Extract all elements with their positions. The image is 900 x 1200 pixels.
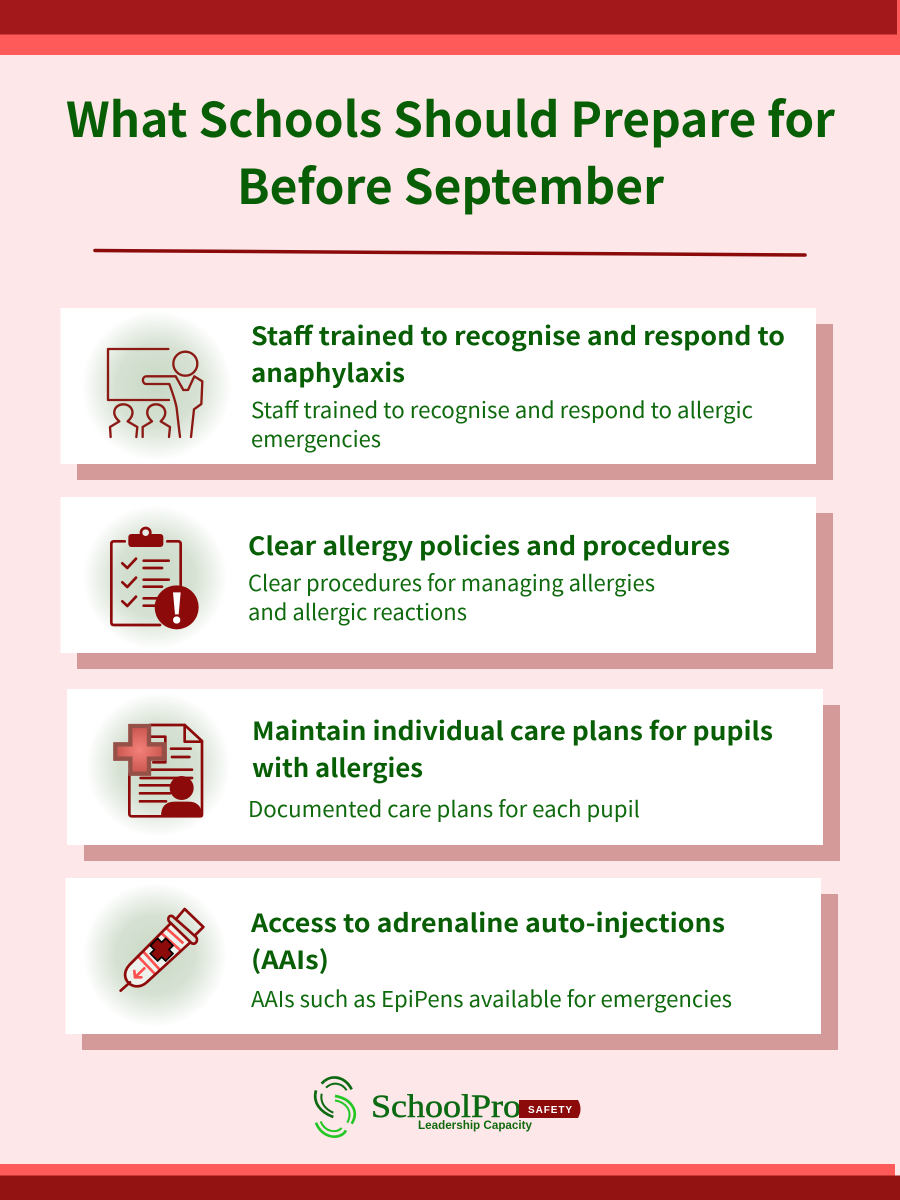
body text <box>251 393 753 454</box>
body text: Staff trained to recognise and respond to allergic <box>251 393 753 425</box>
body text <box>248 566 655 627</box>
heading <box>252 712 773 785</box>
safety badge <box>519 1100 580 1118</box>
body text: Clear procedures for managing allergies <box>248 566 655 598</box>
logo: SchoolPro Safety <box>315 1077 580 1137</box>
wordmark: SchoolPro <box>371 1089 521 1125</box>
title divider line <box>95 250 805 255</box>
panel: allergy policies <box>60 497 833 669</box>
tagline: Leadership Capacity <box>418 1120 533 1132</box>
icon: care plan document with medical cross <box>86 693 231 837</box>
icon: clipboard with alert <box>83 505 227 650</box>
title <box>66 81 835 218</box>
panel: staff training <box>60 308 833 480</box>
bottom band <box>0 1164 900 1200</box>
body text: AAIs such as EpiPens available for emergencies <box>251 982 732 1014</box>
title: Before September <box>237 148 664 218</box>
body text: and allergic reactions <box>248 595 467 627</box>
top band <box>0 0 900 55</box>
heading <box>251 317 785 390</box>
icon: auto-injector <box>83 883 227 1027</box>
heading: Maintain individual care plans for pupils <box>252 712 773 748</box>
panel: care plans <box>67 689 840 861</box>
logo mark <box>315 1077 355 1137</box>
body text: Documented care plans for each pupil <box>248 792 640 824</box>
heading: Access to adrenaline auto-injections <box>250 904 725 940</box>
heading: Staff trained to recognise and respond to <box>251 317 785 353</box>
heading: anaphylaxis <box>251 354 405 390</box>
icon: trainer at board <box>81 311 232 461</box>
panel: adrenaline auto-injections <box>66 878 838 1050</box>
body text: emergencies <box>251 422 381 454</box>
heading: (AAIs) <box>251 941 329 977</box>
safety badge: SAFETY <box>528 1105 572 1116</box>
heading: Clear allergy policies and procedures <box>248 527 730 563</box>
title: What Schools Should Prepare for <box>66 81 835 151</box>
heading <box>250 904 725 977</box>
heading: with allergies <box>252 749 423 785</box>
